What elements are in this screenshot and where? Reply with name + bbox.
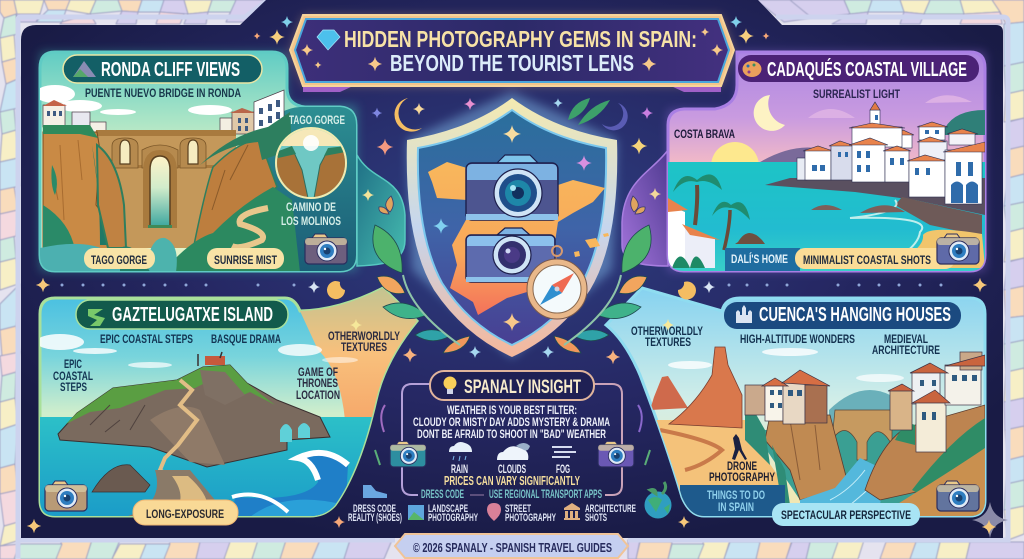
title banner	[290, 15, 734, 92]
prices note: PRICES CAN VARY SIGNIFICANTLY	[444, 474, 580, 488]
labels: Gaztelugatxe callouts: COASTAL	[53, 371, 93, 383]
pill: long-exposure: LONG-EXPOSURE	[146, 507, 224, 521]
icon: globe	[644, 482, 672, 518]
labels: Cuenca callouts: THINGS TO DO	[707, 490, 765, 502]
labels: Cuenca callouts: HIGH-ALTITUDE WONDERS	[740, 334, 855, 346]
street label	[505, 503, 556, 524]
labels: gorge and camino: LOS MOLINOS	[281, 216, 341, 228]
title pill: Gaztelugatxe: GAZTELUGATXE ISLAND	[112, 304, 273, 326]
labels: Cuenca callouts: ARCHITECTURE	[872, 345, 940, 357]
labels: Gaztelugatxe callouts: THRONES	[297, 378, 338, 390]
dress code reality: REALITY (SHOES)	[348, 512, 402, 524]
labels: Cuenca callouts: PHOTOGRAPHY	[709, 472, 775, 484]
title text: HIDDEN PHOTOGRAPHY GEMS IN SPAIN:	[344, 26, 697, 52]
weather labels: FOG	[556, 464, 570, 476]
icon: compass	[527, 246, 587, 319]
labels: Gaztelugatxe callouts: BASQUE DRAMA	[211, 334, 281, 346]
pill: sunrise mist	[207, 248, 284, 269]
insight body text: CLOUDY OR MISTY DAY ADDS MYSTERY & DRAMA	[413, 417, 610, 429]
icon: camera	[305, 234, 347, 264]
weather labels: CLOUDS	[498, 464, 526, 476]
icon: pin	[487, 503, 501, 521]
icon: top camera	[466, 155, 558, 220]
labels: Gaztelugatxe callouts: GAME OF	[298, 367, 338, 379]
islands	[574, 233, 609, 257]
title pill: Gaztelugatxe	[76, 300, 288, 329]
icon: architecture	[564, 503, 580, 520]
insight body text: DONT BE AFRAID TO SHOOT IN "BAD" WEATHER	[417, 429, 606, 441]
icon: camera left	[390, 441, 426, 467]
street label: STREET	[505, 503, 531, 515]
dress code line	[421, 487, 602, 501]
pill: minimalist coastal shots: MINIMALIST COASTAL SHOTS	[803, 255, 931, 267]
labels: gorge and camino	[281, 115, 345, 228]
label: Puente Nuevo: PUENTE NUEVO BRIDGE IN RONDA	[85, 88, 241, 100]
title pill: Ronda: RONDA CLIFF VIEWS	[101, 59, 240, 81]
icon: landscape photo	[408, 505, 424, 520]
dress code line: DRESS CODE	[421, 487, 464, 501]
insight heading pill: SPANALY INSIGHT	[464, 376, 581, 398]
subtitle text: BEYOND THE TOURIST LENS	[390, 50, 634, 76]
dress code line: USE REGIONAL TRANSPORT APPS	[489, 487, 602, 501]
dress code reality	[348, 503, 402, 524]
labels: Gaztelugatxe callouts	[53, 331, 400, 402]
icon: camera	[937, 234, 979, 264]
landscape label: LANDSCAPE	[428, 503, 468, 515]
labels: Gaztelugatxe callouts: EPIC	[64, 359, 82, 371]
architecture label: SHOTS	[585, 512, 607, 524]
labels: Cuenca callouts: OTHERWORLDLY	[631, 326, 703, 338]
moons and small leaves	[327, 98, 696, 299]
pill: spectacular perspective: SPECTACULAR PERSPECTIVE	[781, 510, 911, 522]
labels: Gaztelugatxe callouts: TEXTURES	[341, 342, 387, 354]
landscape label: PHOTOGRAPHY	[428, 512, 478, 524]
vine decorations	[375, 405, 650, 465]
connector: teal tail	[357, 155, 405, 266]
pill: long-exposure	[133, 500, 238, 525]
labels: Gaztelugatxe callouts: EPIC COASTAL STEPS	[100, 334, 193, 346]
pill: sunrise mist: SUNRISE MIST	[214, 255, 277, 267]
label: surrealist light: SURREALIST LIGHT	[813, 89, 900, 101]
labels: Cuenca callouts: IN SPAIN	[718, 502, 754, 514]
insight heading pill	[430, 371, 594, 400]
icon: camera	[937, 481, 979, 511]
icon: camera	[45, 481, 87, 511]
panel: Cuenca's hanging houses	[606, 288, 985, 526]
street label: PHOTOGRAPHY	[505, 512, 556, 524]
title pill: Cadaques	[738, 55, 979, 82]
label: Dali's home: DALÍ'S HOME	[731, 253, 788, 266]
icon: diamond	[317, 30, 340, 50]
panel: Ronda cliff views	[35, 52, 357, 272]
icon: lower camera	[466, 228, 555, 282]
footer badge: © 2026 SPANALY - SPANISH TRAVEL GUIDES	[413, 540, 612, 555]
labels: Gaztelugatxe callouts: STEPS	[60, 382, 87, 394]
weather labels	[451, 464, 570, 476]
ribbon tails	[303, 86, 721, 92]
icon: clouds	[497, 443, 530, 460]
title pill: Ronda	[63, 55, 262, 83]
map of Spain	[428, 162, 605, 315]
icon: fog	[552, 447, 576, 457]
labels: Cuenca callouts: DRONE	[727, 461, 757, 473]
icon: rain	[449, 442, 472, 461]
labels: Cuenca callouts	[631, 326, 940, 514]
dress code reality: DRESS CODE	[353, 503, 396, 515]
panel glows	[40, 15, 985, 358]
labels: Cuenca callouts: MEDIEVAL	[884, 334, 928, 346]
pill: tago gorge: TAGO GORGE	[91, 255, 147, 267]
insight body text	[413, 405, 610, 441]
shield	[407, 98, 617, 357]
panel: Spanaly insight	[348, 371, 672, 524]
tago gorge inset circle	[276, 128, 346, 198]
connector: purple tail	[622, 150, 668, 266]
banner sparkles	[301, 28, 723, 71]
pill: minimalist coastal shots	[795, 248, 955, 269]
panel: Gaztelugatxe island	[36, 288, 420, 525]
pill: tago gorge	[84, 248, 155, 269]
panel: Cadaques coastal village	[668, 52, 988, 274]
icon: shoe	[363, 485, 387, 498]
architecture label	[585, 503, 636, 524]
weather labels: RAIN	[451, 464, 468, 476]
labels: Gaztelugatxe callouts: OTHERWORLDLY	[328, 331, 400, 343]
landscape label	[428, 503, 478, 524]
architecture label: ARCHITECTURE	[585, 503, 636, 515]
pill: spectacular perspective	[772, 503, 920, 526]
label: costa brava: COSTA BRAVA	[674, 129, 735, 141]
labels: gorge and camino: TAGO GORGE	[289, 115, 345, 127]
footer badge	[395, 534, 628, 558]
icon: camera right	[598, 441, 634, 467]
leaves: left wreath	[373, 196, 470, 353]
labels: Gaztelugatxe callouts: LOCATION	[296, 390, 340, 402]
insight body text: WEATHER IS YOUR BEST FILTER:	[447, 405, 577, 417]
leaves: right wreath	[554, 196, 651, 353]
labels: Cuenca callouts: TEXTURES	[645, 337, 691, 349]
title pill: Cuenca	[724, 302, 961, 329]
labels: gorge and camino: CAMINO DE	[286, 202, 336, 214]
